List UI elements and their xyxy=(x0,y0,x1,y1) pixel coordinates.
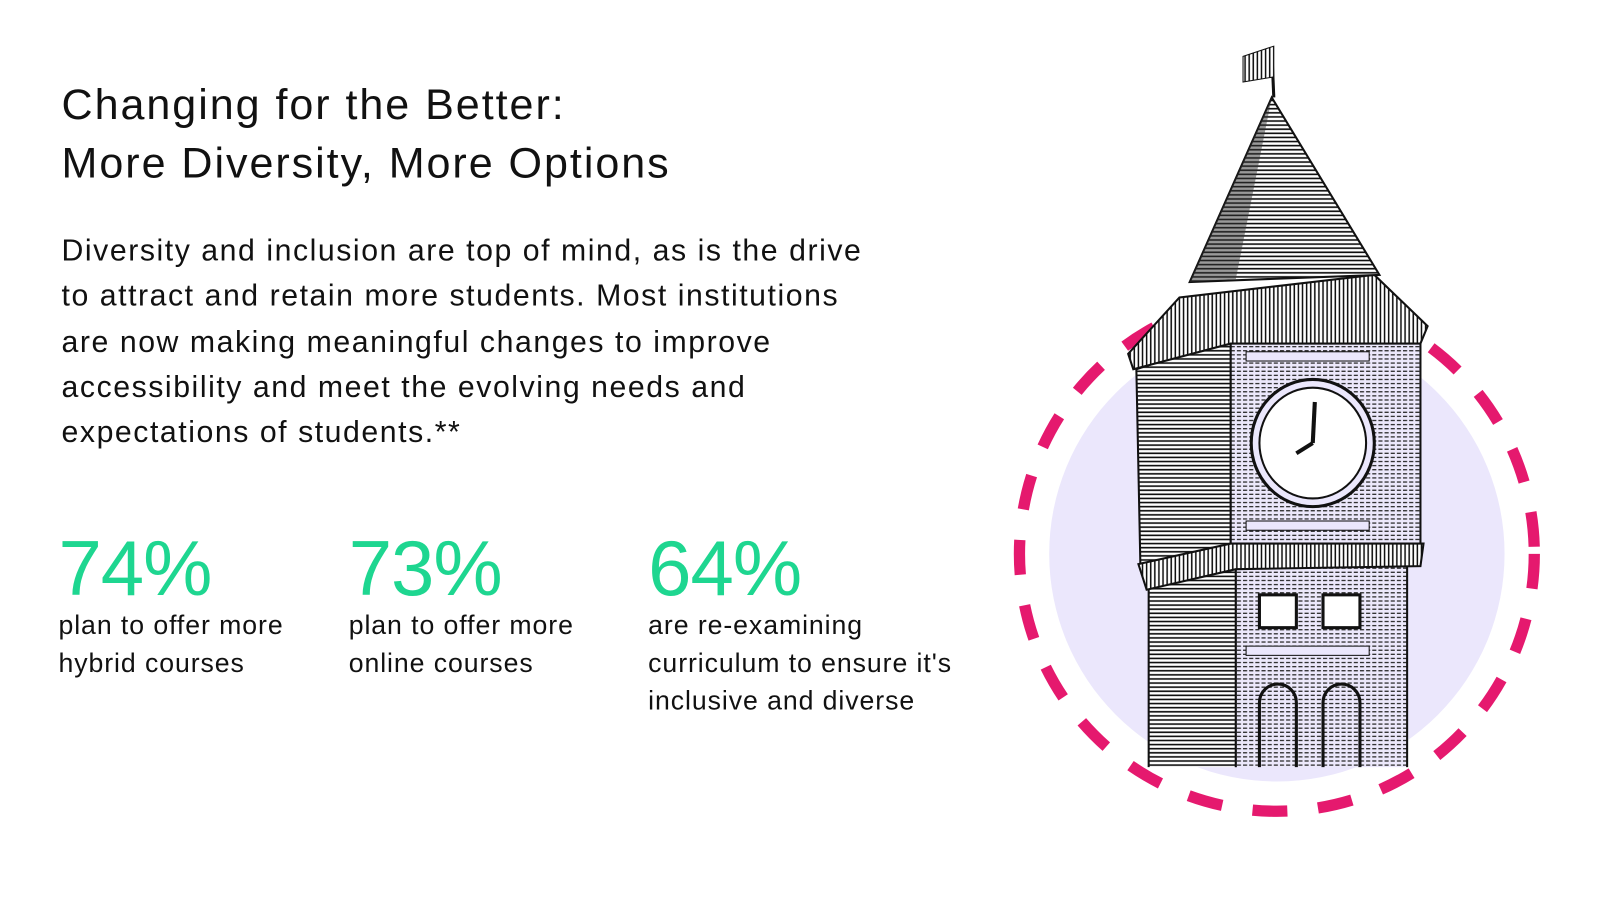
eaves xyxy=(1128,275,1428,369)
title xyxy=(62,80,671,187)
lavender circle xyxy=(1049,326,1505,782)
stat: 64%: are re-examining xyxy=(648,609,863,640)
intro paragraph: are now making meaningful changes to improve xyxy=(62,325,772,359)
flag xyxy=(1272,49,1274,97)
intro paragraph: expectations of students.** xyxy=(62,416,461,449)
stat: 73%: 73% xyxy=(349,525,502,612)
stat: 64%: inclusive and diverse xyxy=(648,685,915,716)
title: More Diversity, More Options xyxy=(62,138,671,187)
stat: 74%: hybrid courses xyxy=(58,647,245,678)
dashed ring xyxy=(1019,296,1534,811)
stat: 64%: curriculum to ensure it's xyxy=(648,647,952,678)
stat: 64% xyxy=(648,525,952,716)
stat: 73%: plan to offer more xyxy=(349,609,574,640)
clock xyxy=(1251,379,1374,507)
windows xyxy=(1259,595,1296,628)
stat: 64%: 64% xyxy=(648,525,801,612)
stat: 74%: 74% xyxy=(58,525,211,612)
band xyxy=(1138,544,1424,590)
intro paragraph: accessibility and meet the evolving needs and xyxy=(62,370,746,404)
illustration: clock tower xyxy=(1014,46,1540,817)
stat: 74%: plan to offer more xyxy=(58,609,284,640)
stat: 74% xyxy=(58,525,284,678)
stat: 73%: online courses xyxy=(349,647,534,678)
clock section xyxy=(1136,338,1231,569)
title: Changing for the Better: xyxy=(62,80,566,128)
stat: 73% xyxy=(349,525,574,678)
spire xyxy=(1190,97,1379,282)
intro paragraph xyxy=(62,234,862,449)
lower section xyxy=(1148,570,1237,768)
intro paragraph: to attract and retain more students. Most institutions xyxy=(62,279,839,313)
intro paragraph: Diversity and inclusion are top of mind, as is the drive xyxy=(62,234,862,268)
ledges xyxy=(1246,352,1369,361)
